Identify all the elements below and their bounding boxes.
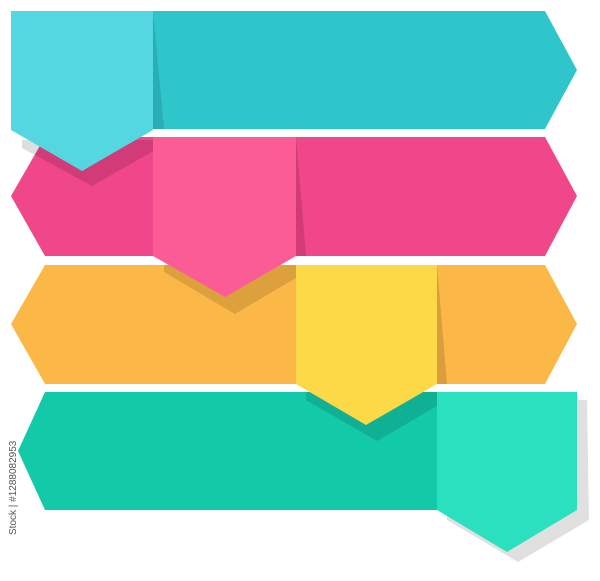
tab 1: light teal [11, 11, 153, 171]
banner 3: orange [11, 265, 577, 384]
banner 4: green [18, 392, 577, 510]
banner 1: teal [11, 11, 577, 129]
banner 2: pink [11, 137, 577, 256]
tab 3: yellow [296, 265, 437, 425]
tab 2: light pink [153, 137, 296, 297]
tab 4: light green [437, 392, 577, 552]
tab shadows [447, 400, 589, 562]
side credit text: Stock | #1288082953 [8, 440, 19, 535]
